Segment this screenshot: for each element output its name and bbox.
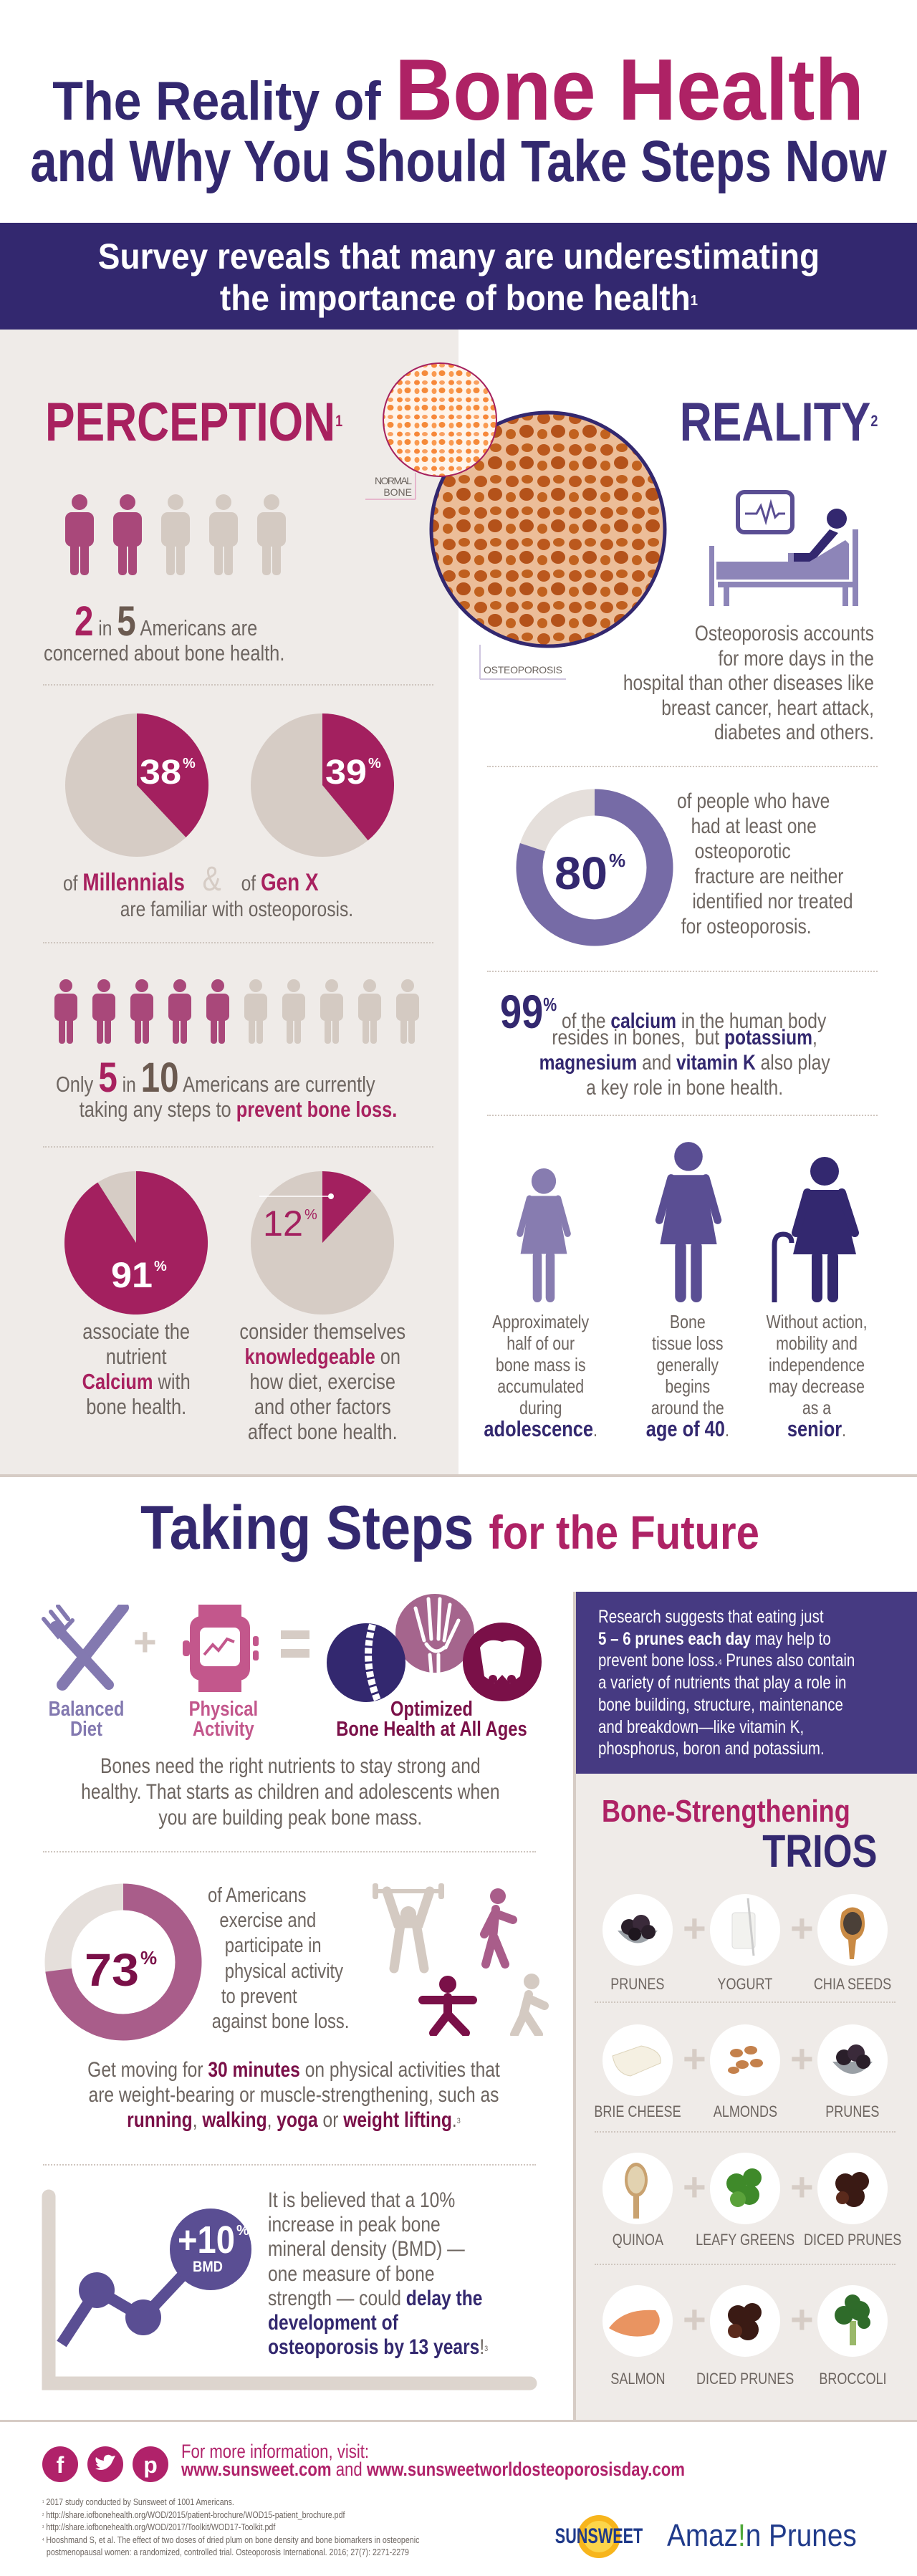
reality: 80% text	[677, 789, 853, 938]
logo: amazin prunes: Amaz!n Prunes	[667, 2518, 857, 2553]
title: The Reality of Bone Health	[53, 41, 864, 138]
text: concerned: concerned about bone health.	[44, 640, 284, 665]
icon: activity watch	[183, 1605, 259, 1692]
text: adolescence: bone mass is	[496, 1354, 586, 1375]
text: get moving: running, walking, yoga or weight lifting.3	[127, 2108, 461, 2132]
text: 73% americans: of Americans	[208, 1884, 306, 1907]
icon: senior woman with cane	[772, 1157, 859, 1302]
panel: prunes research: a variety of nutrients that play a role in	[598, 1673, 846, 1693]
chart: bmd growth: +10	[178, 2219, 235, 2262]
panel: prunes research: phosphorus, boron and potassium.	[598, 1739, 825, 1759]
text: bones need nutrients: Bones need the right nutrients to stay strong and	[100, 1754, 480, 1778]
pie charts: millennials and gen x: 38	[140, 754, 181, 792]
text: calcium: associate the	[82, 1319, 190, 1344]
text: get moving	[87, 2058, 500, 2132]
reality: 99% calcium: a key role in bone health.	[587, 1076, 783, 1100]
footer: more info: www.sunsweet.com and www.sunsweetworldosteoporosisday.com	[181, 2459, 685, 2480]
subtitle line: and Why You Should Take Steps Now	[30, 129, 887, 194]
footer: more info: For more information, visit:	[181, 2441, 369, 2462]
icon row: 2 in 5 people	[65, 494, 286, 575]
text: 73% americans: participate in	[225, 1934, 322, 1957]
labels: balanced diet: Balanced	[48, 1698, 124, 1721]
text: calcium: Calcium with	[82, 1369, 191, 1394]
text: bones need nutrients: you are building peak bone mass.	[158, 1806, 422, 1830]
icon: equals	[281, 1630, 309, 1658]
text: bmd: It is believed that a 10%	[268, 2188, 455, 2212]
text: get moving: Get moving for 30 minutes on physical activities that	[87, 2058, 500, 2082]
reality: 80% donut: 80	[554, 847, 608, 899]
footer: social icons	[42, 2446, 171, 2483]
text: calcium: bone health.	[86, 1394, 186, 1419]
labels: optimized: Optimized	[390, 1698, 472, 1721]
icon: plus: +	[133, 1619, 157, 1664]
text: adolescence: Approximately	[492, 1311, 590, 1332]
text: senior: as a	[802, 1397, 831, 1418]
panel: perception background	[0, 330, 458, 1476]
chart: bmd growth: %	[236, 2223, 249, 2239]
text: knowledgeable: affect bone health.	[248, 1419, 397, 1444]
reality: 99% calcium	[500, 985, 830, 1100]
icon: woman	[655, 1142, 722, 1302]
heading: perception: PERCEPTION1	[45, 392, 342, 453]
reality: 80% text: had at least one	[691, 814, 817, 838]
text: bmd: one measure of bone	[268, 2262, 435, 2286]
text: adolescence: half of our	[507, 1332, 575, 1354]
footnotes: 1 2017 study conducted by Sunsweet of 1001 Americans.	[42, 2496, 234, 2507]
icon: balanced diet	[42, 1605, 129, 1691]
labels: optimized: Bone Health at All Ages	[336, 1718, 527, 1741]
banner: survey	[0, 223, 917, 330]
text: adolescence: adolescence.	[484, 1416, 597, 1441]
reality: hospital text	[623, 622, 874, 744]
text: knowledgeable: and other factors	[254, 1394, 390, 1419]
chart: 73% donut: 73	[85, 1944, 139, 1996]
pie charts: millennials and gen x: 39	[325, 754, 367, 792]
trio row 1: prunes yogurt chia: YOGURT	[718, 1975, 772, 1993]
labels: balanced diet	[48, 1698, 124, 1741]
text: adolescence: accumulated	[498, 1375, 584, 1397]
heading: bone-strengthening trios: Bone-Strengthening	[602, 1794, 850, 1829]
panel: prunes research: 5 – 6 prunes each day may help to	[598, 1629, 831, 1649]
reality: 80% text: for osteoporosis.	[681, 915, 812, 938]
reality: hospital text: for more days in the	[719, 646, 874, 671]
banner: survey: Survey reveals that many are underestimating	[97, 236, 820, 277]
text: get moving: are weight-bearing or muscle-strengthening, such as	[89, 2083, 499, 2107]
reality: 80% text: fracture are neither	[695, 865, 843, 888]
text: senior	[766, 1311, 868, 1441]
icon: girl	[517, 1168, 571, 1302]
footnotes: 3 http://share.iofbonehealth.org/WOD/2017/Toolkit/WOD17-Toolkit.pdf	[42, 2522, 275, 2532]
pie charts: calcium and knowledgeable: %	[154, 1259, 167, 1274]
text: age of 40: around the	[651, 1397, 724, 1418]
text: bones need nutrients: healthy. That starts as children and adolescents when	[81, 1780, 499, 1804]
pie charts: calcium and knowledgeable: 91	[111, 1255, 153, 1295]
trio row 1: prunes yogurt chia	[602, 1894, 888, 1994]
reality: hospital text: Osteoporosis accounts	[695, 622, 874, 645]
panel: prunes research: prevent bone loss.4 Prunes also contain	[598, 1650, 855, 1671]
reality: hospital text: diabetes and others.	[714, 721, 874, 744]
text: age of 40: generally	[657, 1354, 719, 1375]
trio row 1: prunes yogurt chia: PRUNES	[610, 1975, 665, 1993]
chart: 73% donut: %	[140, 1947, 157, 1969]
labels: optimized	[336, 1698, 527, 1741]
panel: prunes research: Research suggests that eating just	[598, 1607, 824, 1627]
labels: physical activity	[189, 1698, 258, 1741]
footnotes: 4 Hooshmand S, et al. The effect of two doses of dried plum on bone density and bone biomarkers in osteopenic	[42, 2534, 419, 2544]
labels: balanced diet: Diet	[70, 1718, 102, 1741]
trio row 2: brie almonds prunes: PRUNES	[825, 2102, 880, 2120]
pie charts: millennials and gen x: %	[368, 756, 381, 772]
logo: sunsweet	[556, 2513, 642, 2560]
trio row 4: salmon diced prunes broccoli: SALMON	[610, 2370, 665, 2388]
illustration: bone comparison: BONE	[383, 486, 412, 498]
text: age of 40	[646, 1311, 729, 1441]
panel: prunes research	[576, 1592, 917, 1774]
trio row 1: prunes yogurt chia: +	[683, 1905, 706, 1951]
text: bones need nutrients	[81, 1754, 499, 1830]
text: bmd	[268, 2188, 488, 2359]
reality: 80% donut: %	[609, 850, 625, 871]
text: senior: may decrease	[769, 1375, 865, 1397]
reality: hospital icon	[709, 490, 858, 606]
heading: taking steps: Taking Steps for the Future	[140, 1494, 759, 1562]
text: calcium	[82, 1319, 191, 1419]
text: 73% americans: exercise and	[219, 1909, 316, 1932]
reality: 99% calcium: magnesium and vitamin K also play	[539, 1051, 830, 1075]
text: 73% americans: against bone loss.	[212, 2010, 349, 2033]
chart: 73% donut	[44, 1884, 202, 2040]
text: senior: Without action,	[766, 1311, 868, 1332]
icons: exercise figures	[373, 1883, 549, 2036]
labels: physical activity: Physical	[189, 1698, 258, 1721]
icon: optimized bones	[327, 1594, 542, 1702]
illustration: bone comparison	[365, 362, 666, 680]
trio row 3: quinoa greens diced prunes	[602, 2153, 888, 2253]
text: knowledgeable: how diet, exercise	[249, 1369, 395, 1394]
text: senior: mobility and	[776, 1332, 858, 1354]
footnotes: 2 http://share.iofbonehealth.org/WOD/2015/patient-brochure/WOD15-patient_brochure.pdf	[42, 2509, 345, 2520]
trio row 1: prunes yogurt chia: +	[790, 1905, 814, 1951]
icon row: 5 in 10 people	[54, 979, 419, 1044]
footnotes	[42, 2496, 419, 2559]
trio row 2: brie almonds prunes: ALMONDS	[713, 2102, 777, 2120]
text: bmd: strength — could delay the	[268, 2287, 482, 2310]
trio row 4: salmon diced prunes broccoli: +	[790, 2297, 814, 2342]
footer: social icons: p	[143, 2452, 158, 2478]
illustration: bone comparison: OSTEOPOROSIS	[484, 664, 562, 676]
stat: 5 in 10: Only 5 in 10 Americans are currently	[56, 1054, 375, 1101]
logo: sunsweet: SUNSWEET	[555, 2524, 643, 2548]
text: age of 40: tissue loss	[652, 1332, 724, 1354]
heading: reality: REALITY2	[679, 392, 878, 453]
panel: trios background	[573, 1774, 917, 2421]
text: prevent bone loss: taking any steps to prevent bone loss.	[79, 1097, 397, 1122]
text: knowledgeable: consider themselves	[239, 1319, 405, 1344]
trio row 4: salmon diced prunes broccoli: DICED PRUNES	[696, 2370, 794, 2388]
trio row 3: quinoa greens diced prunes: LEAFY GREENS	[696, 2231, 794, 2249]
text: are familiar with osteoporosis.	[120, 898, 353, 921]
pie charts: calcium and knowledgeable: 12	[263, 1203, 303, 1244]
banner: survey: the importance of bone health1	[219, 278, 698, 318]
trio row 1: prunes yogurt chia: CHIA SEEDS	[814, 1975, 891, 1993]
text: calcium: nutrient	[106, 1344, 166, 1369]
trio row 3: quinoa greens diced prunes: DICED PRUNES	[804, 2231, 901, 2249]
text: millennials gen x: of Millennials & of Gen X	[63, 860, 319, 898]
illustration: bone comparison: NORMAL	[375, 475, 412, 486]
footnotes: postmenopausal women: a randomized, controlled trial. Osteoporosis International. 2016; 27(7): 2271-2279	[47, 2547, 409, 2557]
text: senior: independence	[769, 1354, 865, 1375]
trio row 2: brie almonds prunes: +	[683, 2036, 706, 2081]
trio row 2: brie almonds prunes: +	[790, 2036, 814, 2081]
chart: bmd growth	[42, 2189, 537, 2390]
panel: prunes research: bone building, structure, maintenance	[598, 1695, 843, 1715]
text: knowledgeable	[239, 1319, 405, 1444]
text: bmd: development of	[268, 2311, 398, 2335]
text: adolescence: during	[519, 1397, 562, 1418]
pie charts: calcium and knowledgeable	[64, 1171, 394, 1315]
text: 73% americans: physical activity	[225, 1960, 343, 1983]
reality: hospital text: hospital than other diseases like	[623, 671, 874, 695]
footer: social icons: f	[57, 2452, 64, 2478]
reality: 99% calcium: resides in bones, but potassium,	[552, 1026, 817, 1049]
reality: 80% text: of people who have	[677, 789, 830, 813]
trio row 2: brie almonds prunes: BRIE CHEESE	[594, 2102, 681, 2120]
pie charts: millennials and gen x	[65, 713, 394, 857]
footer: more info	[181, 2443, 685, 2479]
pie charts: millennials and gen x: %	[183, 756, 196, 772]
text: senior: senior.	[787, 1416, 846, 1441]
text: 73% americans	[208, 1884, 349, 2033]
text: bmd: increase in peak bone	[268, 2213, 441, 2236]
reality: 80% donut	[516, 789, 673, 946]
trio row 4: salmon diced prunes broccoli: BROCCOLI	[819, 2370, 886, 2388]
trio row 3: quinoa greens diced prunes: QUINOA	[612, 2231, 663, 2249]
text: 73% americans: to prevent	[221, 1985, 297, 2008]
panel: prunes research: and breakdown—like vitamin K,	[598, 1717, 804, 1737]
reality: hospital text: breast cancer, heart attack,	[661, 696, 874, 719]
labels: physical activity: Activity	[193, 1718, 254, 1741]
text: age of 40: Bone	[670, 1311, 706, 1332]
stat: 2 in 5: 2 in 5 Americans are	[75, 598, 257, 645]
trio row 3: quinoa greens diced prunes: +	[683, 2164, 706, 2209]
trio row 2: brie almonds prunes	[602, 2024, 888, 2125]
pie charts: calcium and knowledgeable: %	[304, 1207, 317, 1223]
reality: 99% calcium: 99% of the calcium in the human body	[500, 985, 826, 1038]
chart: bmd growth: BMD	[193, 2259, 223, 2275]
reality: 80% text: identified nor treated	[692, 890, 853, 913]
trio row 4: salmon diced prunes broccoli: +	[683, 2297, 706, 2342]
reality: 80% text: osteoporotic	[695, 840, 791, 863]
text: bmd: mineral density (BMD) —	[268, 2237, 465, 2261]
text: TRIOS	[763, 1825, 878, 1877]
text: adolescence	[484, 1311, 597, 1441]
text: age of 40: begins	[666, 1375, 710, 1397]
trio row 4: salmon diced prunes broccoli	[602, 2285, 888, 2385]
trio row 3: quinoa greens diced prunes: +	[790, 2164, 814, 2209]
text: bmd: osteoporosis by 13 years!3	[268, 2335, 488, 2359]
text: knowledgeable: knowledgeable on	[244, 1344, 400, 1369]
text: age of 40: age of 40.	[646, 1416, 729, 1441]
